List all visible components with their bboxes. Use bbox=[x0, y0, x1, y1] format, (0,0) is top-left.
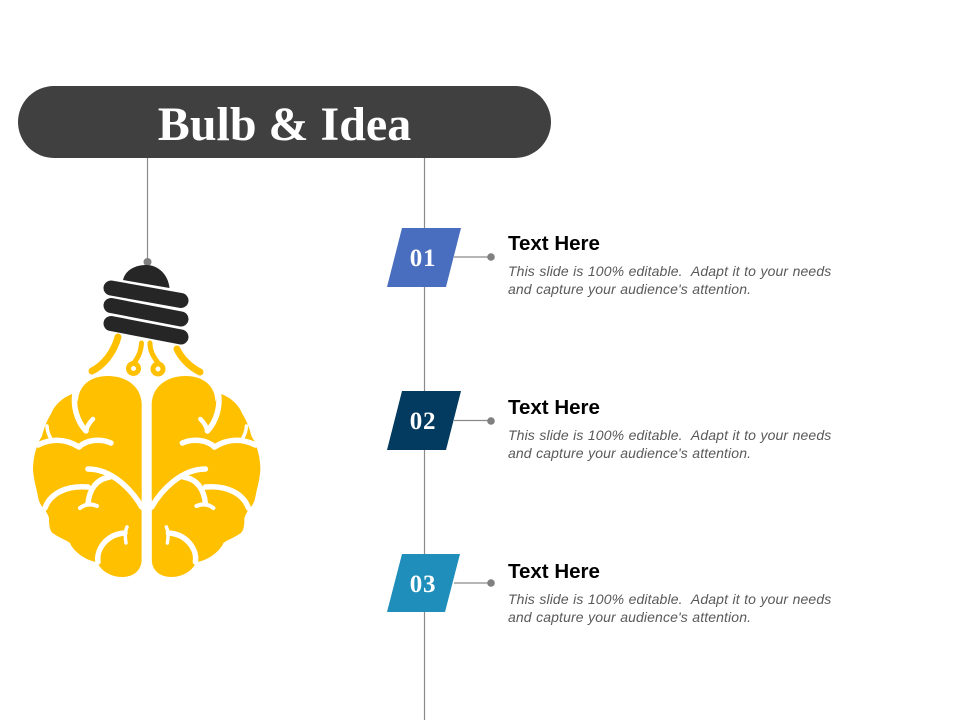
text 03: and capture your audience's attention. bbox=[508, 609, 751, 625]
text 01: This slide is 100% editable. Adapt it to your needs bbox=[508, 263, 831, 279]
text 03: This slide is 100% editable. Adapt it to your needs bbox=[508, 591, 831, 607]
brain left hemisphere bbox=[33, 376, 142, 577]
badge 02: 02 bbox=[410, 408, 436, 435]
bulb filaments bbox=[92, 337, 200, 374]
heading 01: Text Here bbox=[508, 232, 600, 255]
badge 01: 01 bbox=[410, 245, 436, 272]
connector 03 bbox=[454, 579, 495, 587]
item 03 bbox=[387, 554, 495, 612]
connector 02 bbox=[454, 417, 495, 425]
brain right hemisphere bbox=[152, 376, 260, 577]
text 03 bbox=[508, 591, 831, 625]
text 01 bbox=[508, 263, 831, 297]
badge 01 bbox=[387, 228, 461, 287]
text 02: and capture your audience's attention. bbox=[508, 445, 751, 461]
title banner bbox=[18, 86, 551, 158]
item 01 bbox=[387, 228, 495, 287]
title banner: Bulb & Idea bbox=[158, 98, 411, 151]
text 01: and capture your audience's attention. bbox=[508, 281, 751, 297]
heading 02: Text Here bbox=[508, 396, 600, 419]
item 02 bbox=[387, 391, 495, 450]
badge 02 bbox=[387, 391, 461, 450]
brain centre stem bbox=[142, 498, 152, 570]
icon: brain light bulb bbox=[33, 258, 260, 577]
text 02 bbox=[508, 427, 831, 461]
heading 03: Text Here bbox=[508, 560, 600, 583]
text 02: This slide is 100% editable. Adapt it to your needs bbox=[508, 427, 831, 443]
badge 03 bbox=[387, 554, 460, 612]
badge 03: 03 bbox=[410, 571, 436, 598]
bulb socket bbox=[111, 258, 181, 337]
connector 01 bbox=[454, 253, 495, 261]
